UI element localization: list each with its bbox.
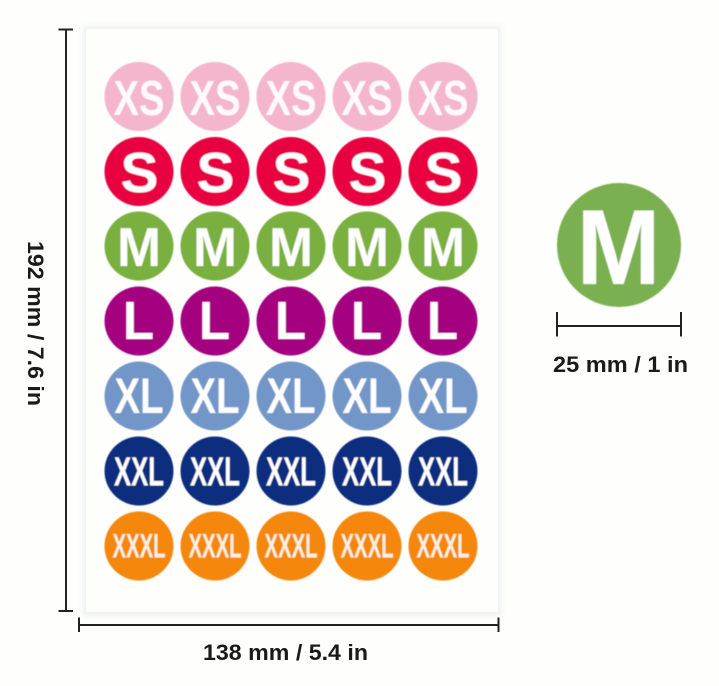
sticker row: M: M (117, 216, 161, 278)
sticker row: L: L (199, 291, 230, 351)
sticker row: XL: XL (342, 368, 392, 424)
sticker row: L: L (427, 291, 458, 351)
sticker row: L: L (123, 291, 154, 351)
arrow: sticker diameter dimension line (557, 312, 681, 336)
sticker row: XXXL: XXXL (188, 528, 242, 566)
sticker row: M: M (193, 216, 237, 278)
sticker row: XL: XL (418, 368, 468, 424)
sticker row: XXXL: XXXL (416, 528, 470, 566)
width label: 138 mm / 5.4 in (203, 640, 368, 665)
sticker row: XXL: XXL (190, 448, 240, 494)
sticker row: XXL: XXL (418, 448, 468, 494)
diameter label: 25 mm / 1 in (553, 352, 688, 377)
sticker row: XXXL (104, 512, 478, 580)
single sticker: M enlarged (557, 183, 681, 307)
panel: sticker sheet (83, 26, 501, 616)
sticker row: XXXL: XXXL (264, 528, 318, 566)
sticker row: XS: XS (190, 72, 240, 126)
sticker row: XXXL: XXXL (112, 528, 166, 566)
sticker row: M: M (421, 216, 465, 278)
sticker row: L: L (275, 291, 306, 351)
sticker row: S: S (272, 141, 310, 205)
sticker row: S: S (196, 141, 234, 205)
sticker row: S: S (424, 141, 462, 205)
single sticker: M enlarged: M (576, 187, 660, 307)
sticker row: XS (104, 62, 478, 131)
sticker row: XXXL: XXXL (340, 528, 394, 566)
sticker row: XS: XS (114, 72, 164, 126)
sticker row: XL: XL (190, 368, 240, 424)
sticker row: L: L (351, 291, 382, 351)
sticker row: XXL: XXL (114, 448, 164, 494)
sticker row: M: M (269, 216, 313, 278)
sticker row: M: M (345, 216, 389, 278)
sticker row: S: S (348, 141, 386, 205)
sticker row: XL: XL (114, 368, 164, 424)
arrow: sheet width dimension line (79, 618, 498, 632)
sticker row: XXL: XXL (266, 448, 316, 494)
sticker row: L (104, 286, 478, 356)
sticker row: M (104, 212, 478, 280)
sticker row: S: S (120, 141, 158, 205)
arrow: sheet height dimension line (58, 30, 73, 611)
sticker row: XL: XL (266, 368, 316, 424)
sticker row: XS: XS (418, 72, 468, 126)
sticker row: XXL: XXL (342, 448, 392, 494)
sticker row: XS: XS (266, 72, 316, 126)
sticker row: XS: XS (342, 72, 392, 126)
height label: 192 mm / 7.6 in (23, 241, 48, 406)
sticker row: XXL (104, 436, 478, 506)
sticker row: S (104, 137, 478, 206)
sticker row: XL (104, 362, 478, 430)
